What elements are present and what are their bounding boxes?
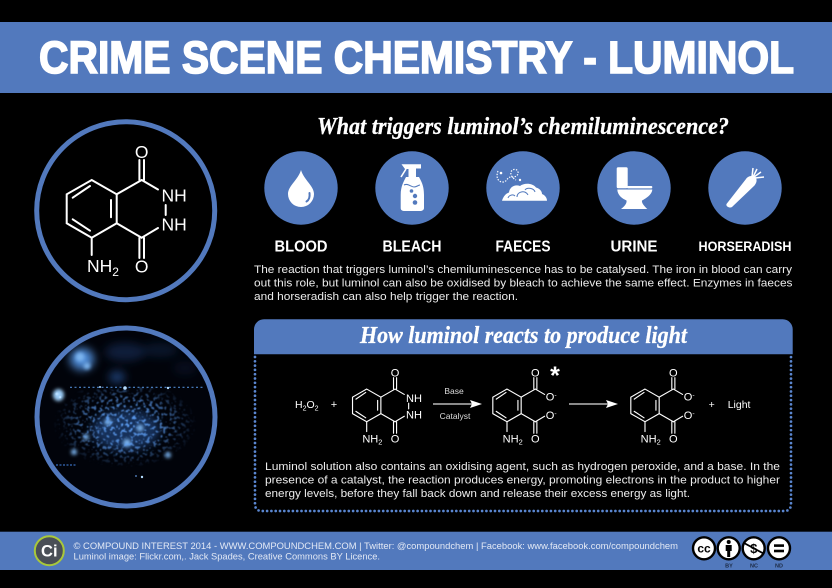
heading: what triggers: What triggers luminol’s chemiluminescence? bbox=[317, 114, 729, 140]
trigger explanation text: The reaction that triggers luminol’s chemiluminescence has to be catalysed. The iron in blood can carry bbox=[254, 264, 792, 276]
small luminol: O bbox=[391, 368, 400, 380]
icon labels: BLOOD bbox=[274, 238, 328, 256]
logo: compound interest: Ci bbox=[41, 542, 58, 560]
small luminol: O bbox=[391, 433, 400, 445]
excited product: - bbox=[554, 411, 557, 418]
plus light: + bbox=[709, 399, 715, 411]
trigger explanation text bbox=[254, 264, 793, 303]
excited product: O bbox=[531, 433, 540, 445]
icon labels: HORSERADISH bbox=[698, 239, 792, 254]
luminol molecule circle: O bbox=[135, 142, 149, 162]
excited product: NH bbox=[503, 433, 519, 445]
luminol molecule circle: 2 bbox=[112, 265, 119, 279]
final product bbox=[631, 368, 695, 447]
luminol molecule circle: NH bbox=[87, 256, 112, 276]
final product: O bbox=[684, 410, 692, 422]
small luminol: 2 bbox=[378, 438, 382, 447]
panel heading bbox=[254, 319, 793, 354]
creative commons icons: NC bbox=[750, 564, 758, 570]
hydrogen peroxide: 2 bbox=[315, 406, 319, 412]
plus light: Light bbox=[728, 399, 751, 411]
bright spots bbox=[53, 386, 205, 478]
icon labels bbox=[274, 238, 792, 256]
icon: faeces bbox=[486, 151, 560, 225]
creative commons icons: cc bbox=[697, 542, 711, 556]
title banner bbox=[0, 22, 832, 93]
reaction explanation text bbox=[265, 461, 780, 500]
creative commons icons: ND bbox=[775, 564, 783, 570]
excited product: 2 bbox=[519, 438, 523, 447]
plus light bbox=[709, 399, 751, 411]
credits text: © COMPOUND INTEREST 2014 - WWW.COMPOUNDCHEM.COM | Twitter: @compoundchem | Facebook: www.facebook.com/compoundchem bbox=[74, 541, 678, 552]
trigger explanation text: and horseradish can also help trigger the reaction. bbox=[254, 291, 518, 303]
luminol molecule circle: O bbox=[135, 256, 149, 276]
final product: O bbox=[669, 368, 678, 380]
creative commons icons: $ bbox=[750, 541, 758, 556]
arrow: base and catalyst: Base bbox=[444, 386, 464, 396]
small luminol: NH bbox=[362, 433, 378, 445]
panel heading: How luminol reacts to produce light bbox=[359, 323, 688, 349]
icon labels: FAECES bbox=[496, 238, 551, 256]
final product: O bbox=[669, 433, 678, 445]
final product: NH bbox=[641, 433, 657, 445]
plus: + bbox=[331, 399, 337, 411]
final product: 2 bbox=[657, 438, 661, 447]
small luminol bbox=[353, 368, 422, 447]
trigger explanation text: out this role, but luminol can also be oxidised by bleach to achieve the same effect. Enzymes in faeces bbox=[254, 278, 793, 290]
final product: - bbox=[692, 392, 695, 399]
arrow: base and catalyst bbox=[433, 386, 482, 421]
final product: O bbox=[684, 391, 692, 403]
excited state star: * bbox=[550, 362, 560, 390]
final product: - bbox=[692, 411, 695, 418]
small luminol: NH bbox=[406, 393, 422, 405]
excited product: O bbox=[531, 368, 540, 380]
hydrogen peroxide: O bbox=[306, 399, 315, 411]
arrow: base and catalyst: Catalyst bbox=[440, 411, 471, 421]
luminol molecule circle bbox=[37, 122, 215, 300]
icon: horseradish bbox=[708, 151, 782, 225]
panel: how luminol reacts bbox=[254, 319, 793, 511]
icon: bleach bbox=[375, 151, 449, 225]
creative commons icons: BY bbox=[725, 564, 733, 570]
luminol molecule circle: NH bbox=[162, 214, 187, 234]
logo: compound interest bbox=[35, 536, 64, 565]
credits text bbox=[74, 541, 678, 562]
icon labels: URINE bbox=[610, 238, 658, 256]
creative commons icons bbox=[693, 537, 790, 570]
reaction explanation text: presence of a catalyst, the reaction produces energy, promoting electrons in the product to higher bbox=[265, 475, 780, 487]
luminol glow photo circle bbox=[34, 327, 218, 509]
hydrogen peroxide: 2 bbox=[303, 406, 307, 412]
reaction explanation text: energy levels, before they fall back down and release their excess energy as light. bbox=[265, 488, 690, 500]
credits text: Luminol image: Flickr.com,. Jack Spades, Creative Commons BY Licence. bbox=[74, 552, 380, 562]
small luminol: NH bbox=[406, 410, 422, 422]
reaction scheme bbox=[295, 362, 751, 447]
reaction explanation text: Luminol solution also contains an oxidising agent, such as hydrogen peroxide, and a base. In the bbox=[265, 461, 780, 473]
luminol molecule circle: NH bbox=[162, 186, 187, 206]
footer band bbox=[0, 532, 832, 570]
icon: blood bbox=[264, 151, 338, 225]
arrow bbox=[569, 400, 618, 408]
excited product: - bbox=[554, 392, 557, 399]
excited product bbox=[493, 368, 557, 447]
hydrogen peroxide: H bbox=[295, 399, 303, 411]
excited product: O bbox=[546, 410, 554, 422]
icon: urine bbox=[597, 151, 671, 225]
excited product: O bbox=[546, 391, 554, 403]
icon labels: BLEACH bbox=[382, 238, 442, 256]
